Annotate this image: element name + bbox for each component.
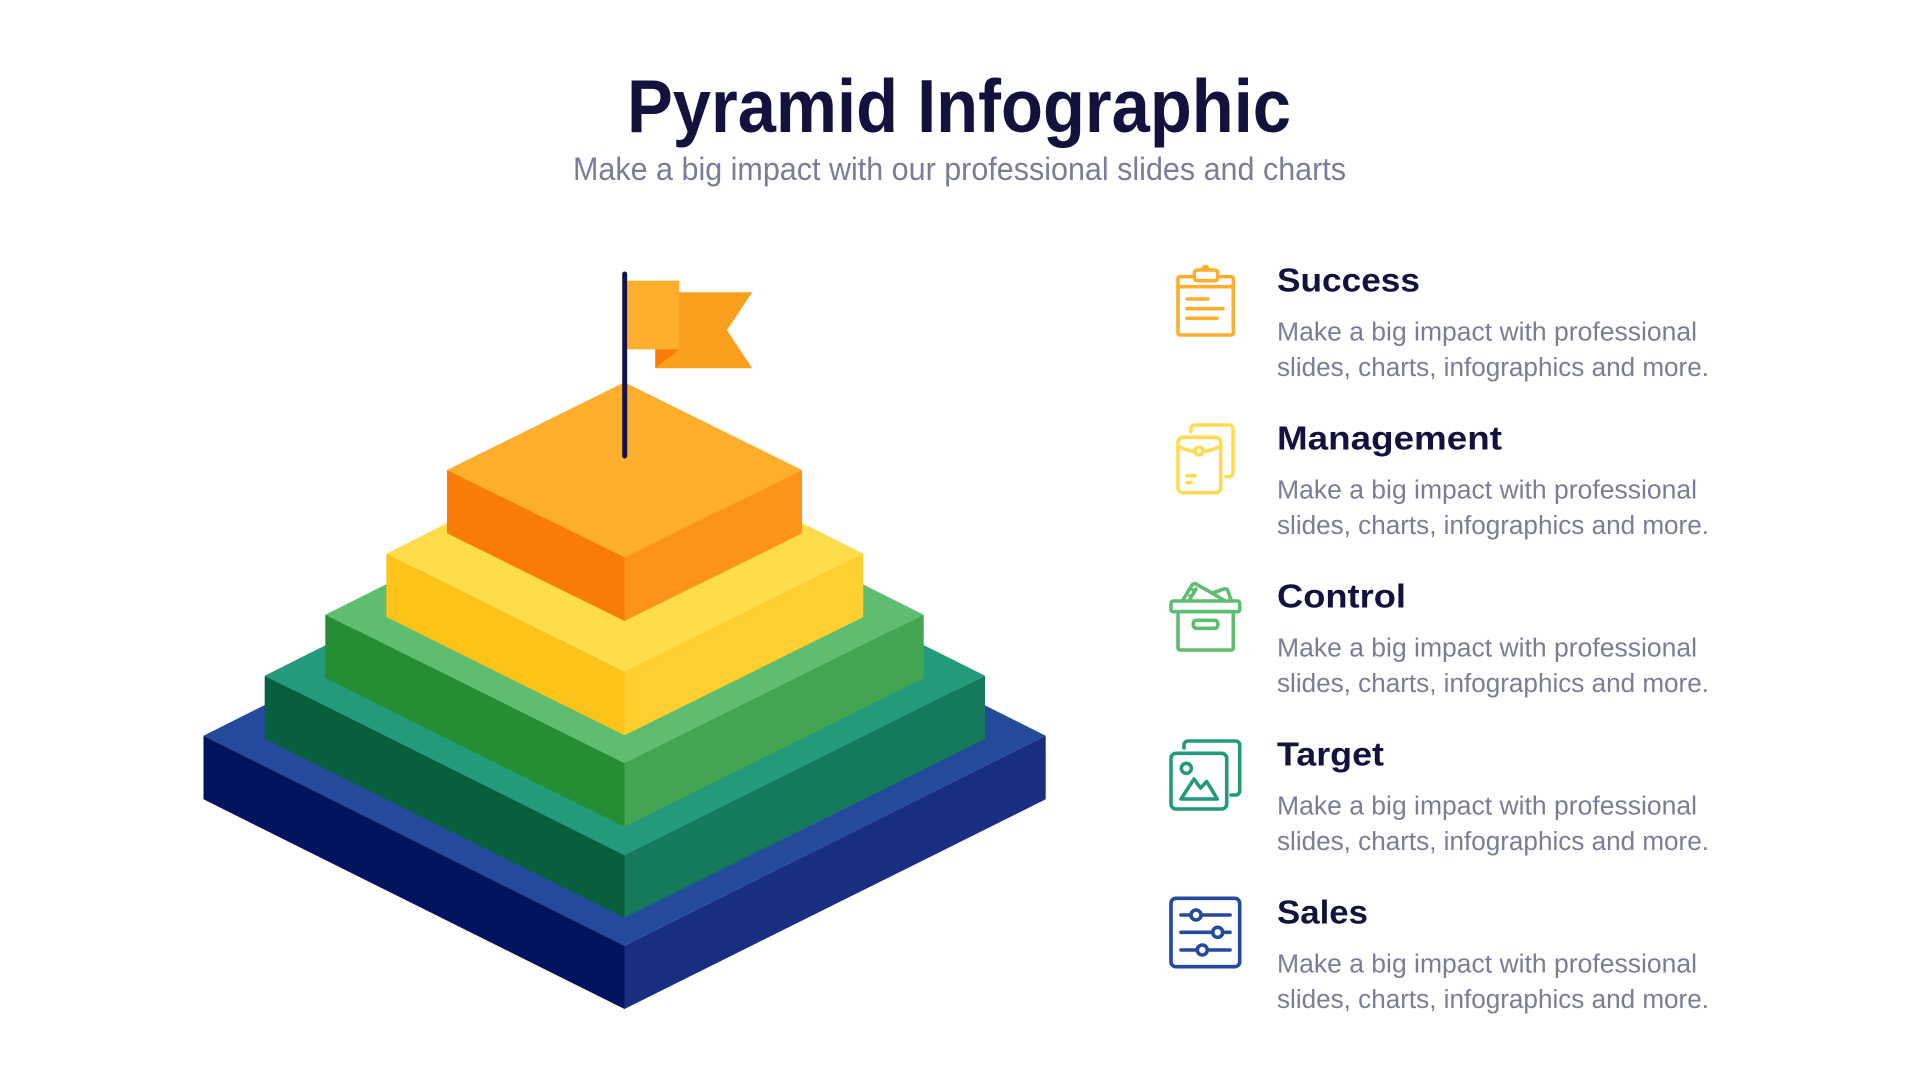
icon: box bbox=[1171, 584, 1240, 650]
tier: control (green) bbox=[325, 465, 924, 827]
tier: sales (blue) bbox=[204, 525, 1046, 1009]
body text: slides, charts, infographics and more. bbox=[1277, 986, 1709, 1014]
heading: Target bbox=[1277, 736, 1384, 772]
icon: clipboard bbox=[1178, 266, 1233, 335]
heading: Success bbox=[1277, 262, 1420, 299]
heading: Control bbox=[1277, 578, 1406, 615]
heading: Sales bbox=[1277, 894, 1368, 930]
title: Pyramid Infographic bbox=[627, 64, 1291, 148]
body text: slides, charts, infographics and more. bbox=[1277, 354, 1709, 382]
icon: images bbox=[1171, 741, 1240, 809]
body text: Make a big impact with professional bbox=[1277, 793, 1697, 821]
heading: Management bbox=[1277, 420, 1502, 457]
body text: Make a big impact with professional bbox=[1277, 635, 1697, 663]
body text: slides, charts, infographics and more. bbox=[1277, 828, 1709, 856]
item: management bbox=[1178, 420, 1709, 540]
subtitle: Make a big impact with our professional slides and charts bbox=[573, 151, 1346, 187]
item: sales bbox=[1171, 894, 1709, 1014]
body text: Make a big impact with professional bbox=[1277, 477, 1697, 505]
icon: sliders bbox=[1171, 898, 1240, 967]
item: success bbox=[1178, 262, 1709, 382]
body text: slides, charts, infographics and more. bbox=[1277, 512, 1709, 540]
tier: management (yellow) bbox=[386, 434, 863, 735]
pyramid chart bbox=[204, 274, 1046, 1009]
body text: Make a big impact with professional bbox=[1277, 951, 1697, 979]
body text: Make a big impact with professional bbox=[1277, 319, 1697, 347]
icon: envelopes bbox=[1178, 425, 1233, 493]
item: target bbox=[1171, 736, 1709, 856]
tier: success (orange) bbox=[447, 382, 802, 621]
icon: flag bbox=[625, 274, 752, 456]
body text: slides, charts, infographics and more. bbox=[1277, 670, 1709, 698]
tier: target (teal) bbox=[265, 496, 985, 918]
item: control bbox=[1171, 578, 1709, 698]
